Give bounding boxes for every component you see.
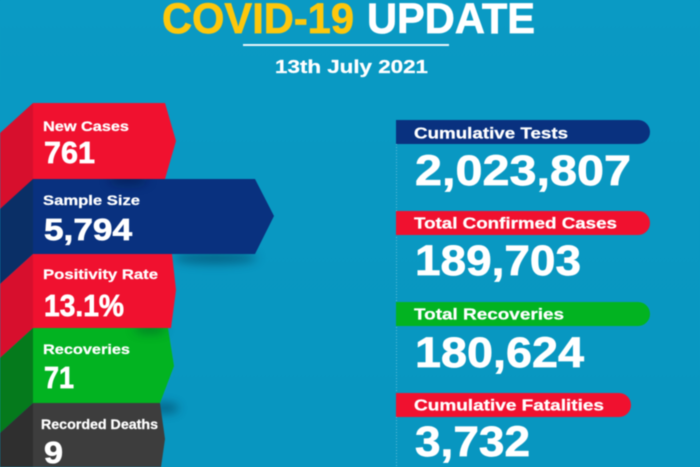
ribbon: positivity rate: Positivity Rate bbox=[43, 266, 158, 282]
red ribbon shadow on blue bbox=[108, 175, 148, 185]
panel: cumulative tests: 2,023,807 bbox=[415, 147, 631, 195]
panel: total recoveries: Total Recoveries bbox=[414, 306, 564, 324]
panel: total confirmed cases: 189,703 bbox=[415, 237, 581, 285]
ribbon: recorded deaths: Recorded Deaths bbox=[41, 416, 158, 432]
panel: daily figures ribbon bbox=[0, 103, 274, 467]
panel: cumulative tests bbox=[396, 120, 650, 195]
ribbon: recoveries: 71 bbox=[44, 360, 74, 395]
panel: cumulative fatalities: 3,732 bbox=[415, 418, 530, 466]
title bbox=[162, 0, 535, 43]
ribbon: new cases: 761 bbox=[44, 135, 95, 170]
ribbon: recoveries bbox=[0, 328, 174, 433]
panel: total recoveries bbox=[396, 302, 650, 377]
panel: cumulative fatalities bbox=[396, 393, 631, 466]
ribbon: positivity rate bbox=[0, 254, 176, 358]
panel: total recoveries: 180,624 bbox=[415, 329, 584, 377]
ribbon: recorded deaths bbox=[0, 403, 165, 467]
date: 13th July 2021 bbox=[275, 56, 428, 77]
panel: cumulative tests: Cumulative Tests bbox=[414, 126, 568, 142]
ribbon: positivity rate: 13.1% bbox=[44, 288, 124, 323]
panel: total confirmed cases bbox=[396, 211, 650, 285]
ribbon: sample size: Sample Size bbox=[43, 192, 140, 208]
deaths ribbon cast shadow bbox=[151, 403, 179, 413]
panel: total confirmed cases: Total Confirmed Cases bbox=[414, 216, 617, 232]
panel: cumulative fatalities: Cumulative Fatalities bbox=[414, 398, 604, 414]
ribbon: sample size: 5,794 bbox=[44, 212, 133, 247]
ribbon: new cases bbox=[0, 103, 176, 209]
blue ribbon cast shadow bbox=[173, 252, 257, 264]
ribbon: recoveries: Recoveries bbox=[43, 341, 130, 357]
positivity ribbon shadow on green bbox=[134, 325, 166, 333]
ribbon: sample size bbox=[0, 179, 274, 284]
ribbon: new cases: New Cases bbox=[43, 118, 129, 134]
